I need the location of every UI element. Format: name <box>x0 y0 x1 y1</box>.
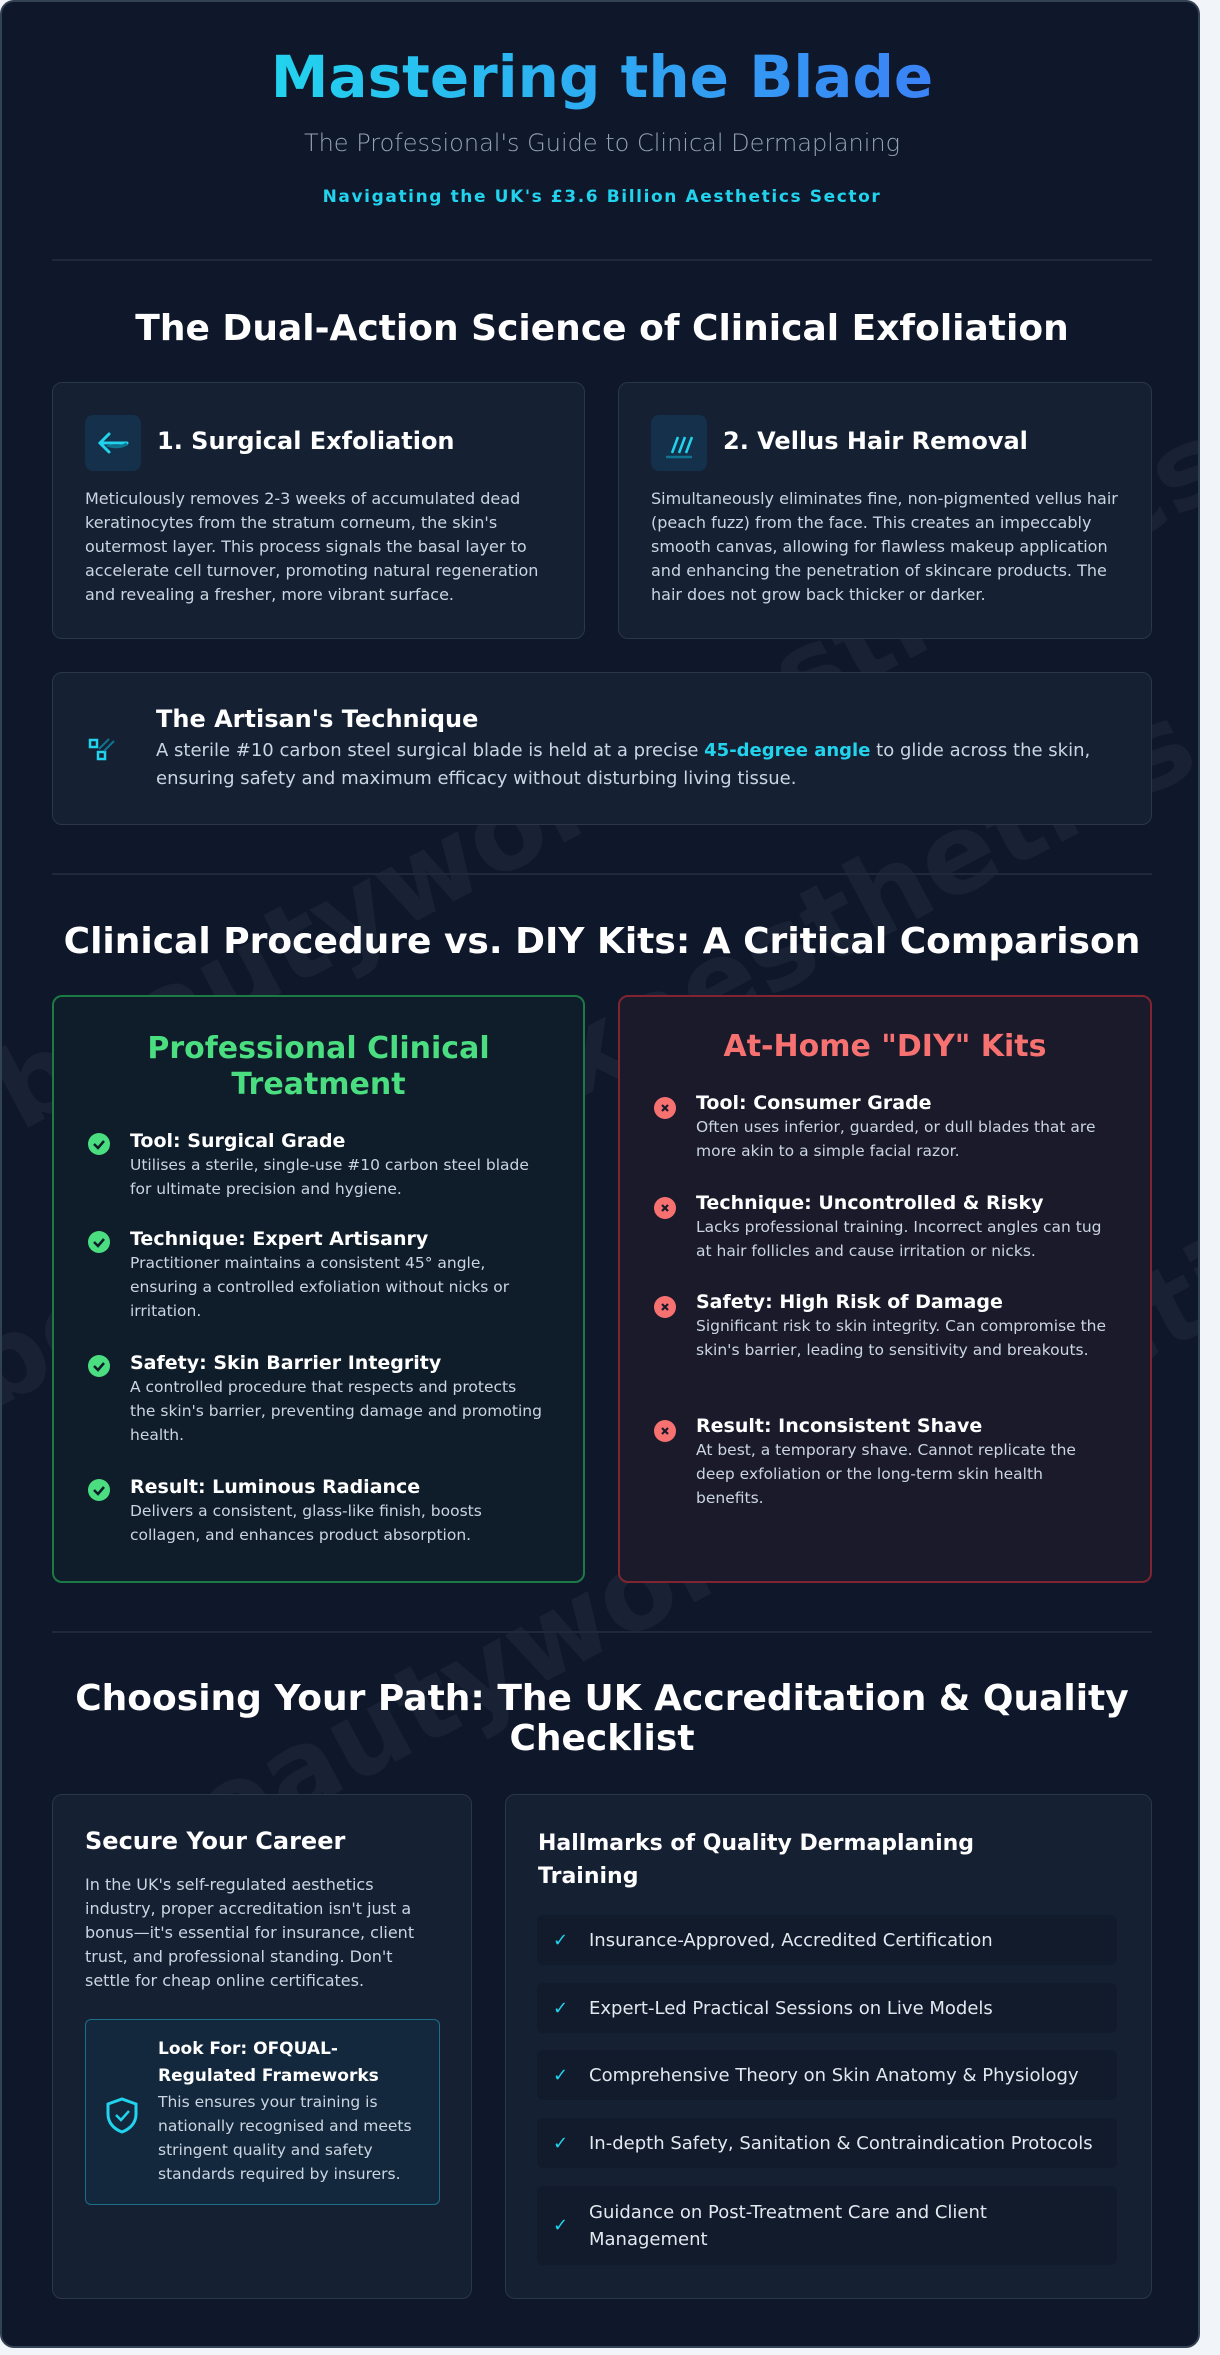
panel: hallmarks checklist <box>505 1794 1152 2299</box>
callout: ofqual <box>85 2019 440 2205</box>
checklist item 5: ✓ <box>553 2215 568 2236</box>
panel: vellus hair <box>618 382 1152 639</box>
item technique: Lacks professional training. Incorrect angles can tug at hair follicles and cause irritation or nicks. <box>696 1218 1102 1260</box>
item tool: Tool: Consumer Grade <box>696 1092 932 1114</box>
heading: At-Home "DIY" Kits <box>724 1029 1046 1064</box>
item safety: Safety: Skin Barrier Integrity <box>130 1352 441 1374</box>
item result: Delivers a consistent, glass-like finish, boosts collagen, and enhances product absorption. <box>130 1502 482 1544</box>
text: In the UK's self-regulated aesthetics industry, proper accreditation isn't just a bonus—it's essential for insurance, client trust, and professional standing. Don't settle for cheap online certificates. <box>85 1875 414 1990</box>
checklist item 2: ✓ <box>553 1998 568 2018</box>
icon: arrow <box>85 415 141 471</box>
heading: Hallmarks of Quality Dermaplaning Training <box>538 1831 974 1889</box>
checklist item 1: ✓ <box>553 1930 568 1950</box>
panel: DIY <box>618 995 1152 1583</box>
item result <box>88 1476 482 1544</box>
heading: Treatment <box>231 1067 406 1102</box>
text: Simultaneously eliminates fine, non-pigmented vellus hair (peach fuzz) from the face. This creates an impeccably smooth canvas, allowing for flawless makeup application and enhancing the penetration of skincare products. The hair does not grow back thicker or darker. <box>651 489 1118 604</box>
item tool: Utilises a sterile, single-use #10 carbon steel blade for ultimate precision and hygiene. <box>130 1156 529 1198</box>
heading: comparison: Clinical Procedure vs. DIY Kits: A Critical Comparison <box>64 921 1140 962</box>
heading: accreditation: Checklist <box>509 1718 695 1759</box>
text: A sterile #10 carbon steel surgical blade is held at a precise 45-degree angle to glide across the skin, ensuring safety and maximum efficacy without disturbing living tissue. <box>156 740 1090 789</box>
panel: artisan technique <box>52 672 1152 825</box>
checklist item 2: Expert-Led Practical Sessions on Live Models <box>589 1998 993 2018</box>
checklist item 2 <box>537 1983 1117 2033</box>
callout text: Look For: OFQUAL-Regulated Frameworks <box>158 2039 379 2086</box>
item technique <box>654 1192 1102 1260</box>
checklist item 3: ✓ <box>553 2064 568 2086</box>
checklist item 3 <box>537 2050 1117 2100</box>
tagline: Navigating the UK's £3.6 Billion Aesthetics Sector <box>323 187 881 207</box>
item safety: Safety: High Risk of Damage <box>696 1291 1003 1313</box>
item technique <box>88 1228 510 1320</box>
item safety <box>654 1291 1106 1359</box>
item safety: A controlled procedure that respects and protects the skin's barrier, preventing damage and promoting health. <box>130 1378 542 1444</box>
callout text <box>158 2039 412 2183</box>
panel: secure career <box>52 1794 472 2299</box>
item result: Result: Luminous Radiance <box>130 1476 420 1498</box>
item result: At best, a temporary shave. Cannot replicate the deep exfoliation or the long-term skin health benefits. <box>696 1441 1076 1507</box>
heading: dual action: The Dual-Action Science of Clinical Exfoliation <box>135 308 1069 349</box>
title: Mastering the Blade <box>271 43 933 111</box>
heading: accreditation: Choosing Your Path: The UK Accreditation & Quality <box>75 1678 1129 1719</box>
text: Meticulously removes 2-3 weeks of accumulated dead keratinocytes from the stratum corneum, the skin's outermost layer. This process signals the basal layer to accelerate cell turnover, promoting natural regeneration and revealing a fresher, more vibrant surface. <box>85 489 538 604</box>
checklist item 5: Management <box>589 2228 708 2250</box>
item safety: Significant risk to skin integrity. Can compromise the skin's barrier, leading to sensitivity and breakouts. <box>696 1317 1106 1359</box>
item tool: Tool: Surgical Grade <box>130 1130 345 1152</box>
heading: accreditation <box>75 1678 1129 1759</box>
item tool <box>88 1130 529 1198</box>
item technique: Technique: Expert Artisanry <box>130 1228 428 1250</box>
icon: hair <box>651 415 707 471</box>
item result: Result: Inconsistent Shave <box>696 1415 982 1437</box>
heading: 1. Surgical Exfoliation <box>157 427 455 455</box>
subtitle: The Professional's Guide to Clinical Dermaplaning <box>304 129 900 157</box>
item result <box>654 1415 1076 1507</box>
item technique: Technique: Uncontrolled & Risky <box>696 1192 1043 1214</box>
heading: Secure Your Career <box>85 1827 345 1855</box>
heading <box>147 1031 490 1102</box>
item technique: Practitioner maintains a consistent 45° angle, ensuring a controlled exfoliation without nicks or irritation. <box>130 1254 509 1320</box>
checklist item 4 <box>537 2118 1117 2168</box>
item tool <box>654 1092 1096 1160</box>
checklist item 1: Insurance-Approved, Accredited Certification <box>589 1930 993 1950</box>
heading: Professional Clinical <box>147 1031 490 1066</box>
item tool: Often uses inferior, guarded, or dull blades that are more akin to a simple facial razor. <box>696 1118 1096 1160</box>
panel: surgical exfoliation <box>52 382 585 639</box>
checklist item 5 <box>537 2186 1117 2265</box>
heading: The Artisan's Technique <box>156 705 478 733</box>
checklist item 3: Comprehensive Theory on Skin Anatomy & Physiology <box>589 2064 1079 2086</box>
checklist item 4: In-depth Safety, Sanitation & Contraindication Protocols <box>589 2132 1093 2154</box>
checklist item 4: ✓ <box>553 2132 568 2154</box>
panel: professional <box>52 995 585 1583</box>
heading: 2. Vellus Hair Removal <box>723 427 1028 455</box>
icon: blade angle <box>88 738 115 760</box>
item safety <box>88 1352 542 1444</box>
icon: shield <box>106 2097 138 2134</box>
checklist item 5: Guidance on Post-Treatment Care and Client <box>589 2202 987 2222</box>
checklist item 1 <box>537 1915 1117 1965</box>
callout text: This ensures your training is nationally recognised and meets stringent quality and safety standards required by insurers. <box>158 2093 412 2183</box>
